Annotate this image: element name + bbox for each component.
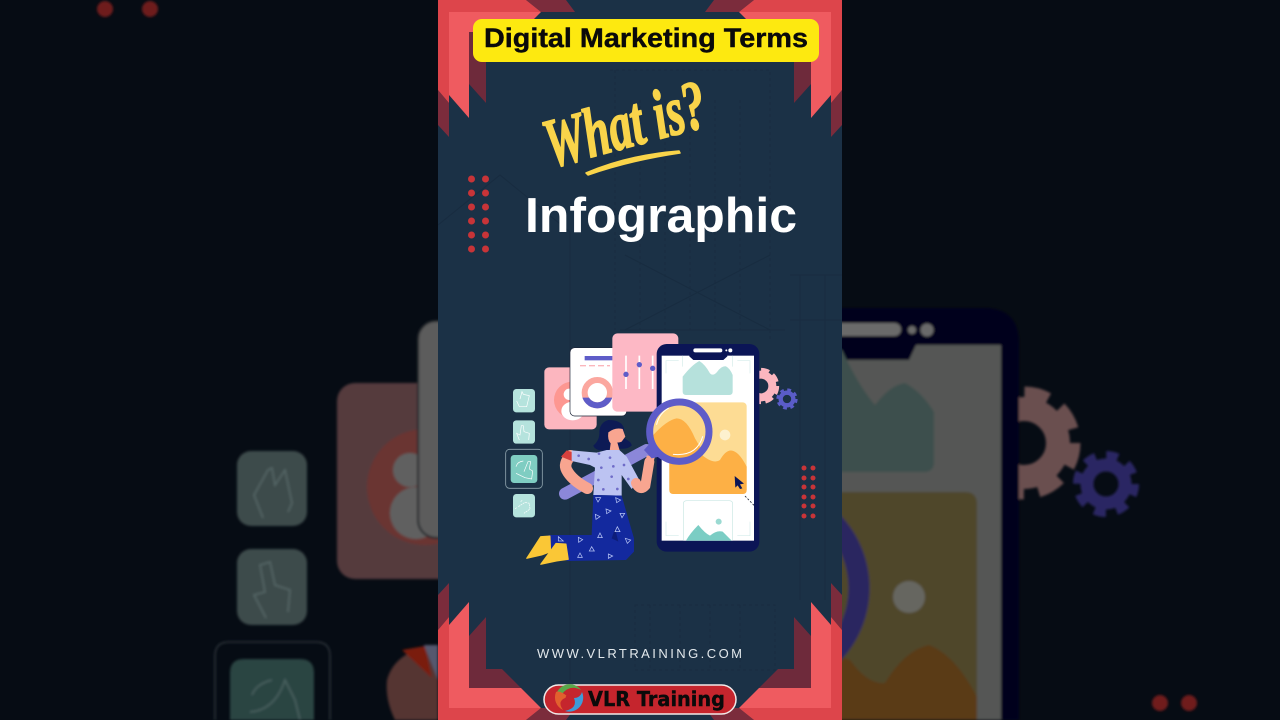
backdrop dots left [97,1,158,17]
blurred backdrop: left side [97,1,483,720]
sliders card pink [612,333,678,412]
title: Infographic: Infographic [525,189,797,243]
right arm [636,462,649,488]
backdrop gesture tile 2 [237,549,307,625]
backdrop speaker and notch [820,323,934,360]
icon: gesture tile 3 active [506,449,542,488]
corner frame: bottom left [438,583,575,720]
backdrop gear blue [1078,456,1134,512]
backdrop arm [387,645,438,720]
cursor [735,476,744,489]
phone image: bottom outline [683,501,733,541]
magnifier lens [644,402,710,461]
red dots right [802,466,816,518]
handwritten heading: What is?: What is? [535,66,715,183]
backdrop phone screen [820,345,1001,720]
corner frame: top left [438,0,575,137]
shoes [527,536,551,558]
backdrop gear pink [975,394,1073,492]
chart card white [570,348,627,416]
brand pill: VLR Training [544,684,736,714]
backdrop image yellow [820,492,977,720]
trousers [548,495,634,561]
backdrop white card [418,321,478,538]
backdrop image teal [820,350,934,472]
phone [657,344,759,552]
central poster panel [438,0,842,720]
illustration: person inspecting phone [506,333,796,564]
gear pink [745,370,777,402]
gear blue [778,390,796,408]
icon: VLR swirl logo [555,684,583,712]
backdrop dots right [1152,695,1197,711]
red dots left [468,176,489,252]
corner frame: bottom right [705,583,842,720]
magnifier handle [565,450,647,494]
phone image: top teal [683,361,733,395]
icon: gesture tile 4 [513,494,535,517]
profile card pink [544,367,597,429]
face and neck [608,428,625,453]
backdrop gesture tile 1 [237,451,307,526]
shirt [572,450,639,496]
phone image: main orange [669,402,747,494]
corner frame: top right [705,0,842,137]
website address: WWW.VLRTRAINING.COM [537,646,742,661]
backdrop magnifier ring [669,493,859,683]
brand pill: VLR Training: VLR Training [588,687,725,711]
icon: gesture tile 1 [513,389,535,412]
backdrop active tile [215,642,330,720]
backdrop phone body [820,308,1019,720]
blurred backdrop: right side [669,308,1197,720]
icon: gesture tile 2 [513,420,535,444]
heading label: Digital Marketing Terms [473,19,819,62]
backdrop profile card [337,383,483,579]
left arm [566,456,587,488]
faint city background [438,70,842,680]
person [527,420,655,564]
handwritten heading: What is? [535,66,715,183]
hair [593,420,632,451]
heading label: Digital Marketing Terms: Digital Marketing Terms [484,23,808,53]
